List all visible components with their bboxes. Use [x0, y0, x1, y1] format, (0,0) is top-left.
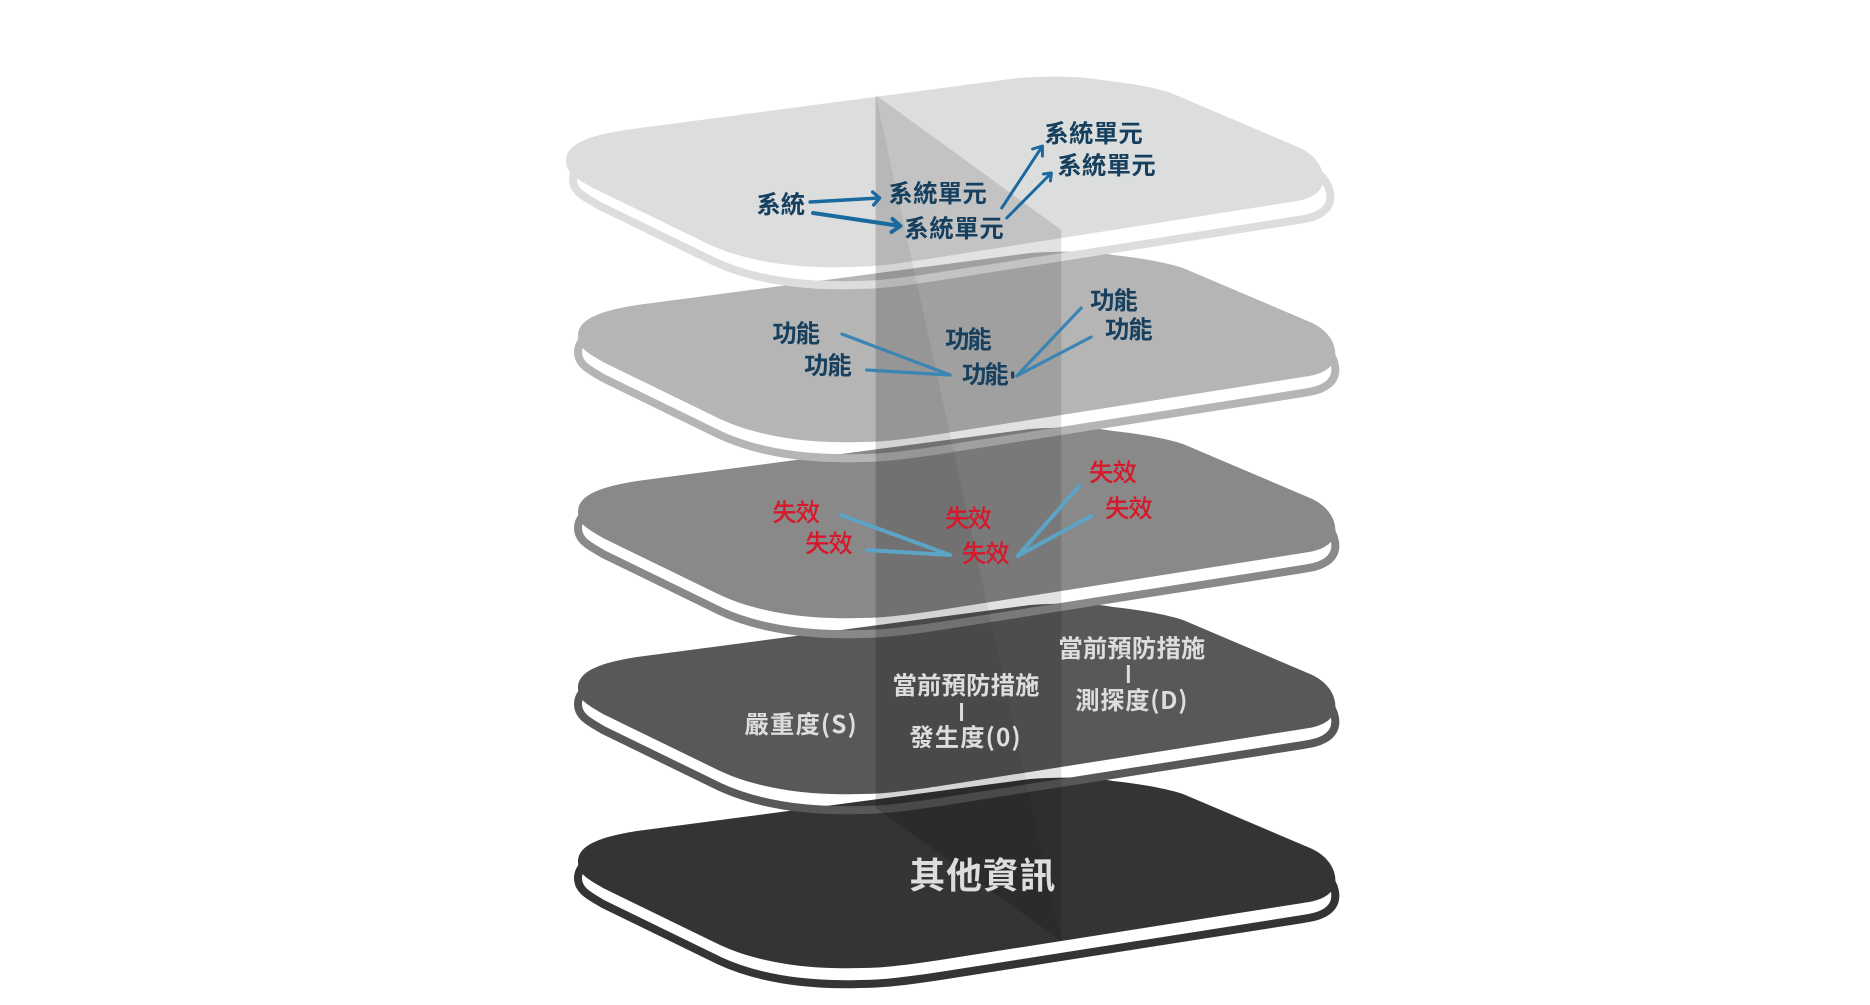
layer 2 text and lines: functions: [772, 282, 1153, 391]
label: function 1: 功能: [772, 315, 820, 350]
label: failure 1: 失效: [772, 494, 820, 529]
label: current prevention, detection: 當前預防措施: [1058, 630, 1205, 665]
label: system element c: 系統單元: [1044, 115, 1143, 150]
label: failure 5: 失效: [1089, 454, 1137, 489]
plate 5: other information: [578, 778, 1335, 984]
arrows: system hierarchy: [810, 146, 1051, 232]
label: system element a: 系統單元: [889, 175, 987, 210]
label: severity: 嚴重度(S): [745, 706, 857, 741]
label: system element b: 系統單元: [904, 210, 1004, 245]
label: function 2: 功能: [804, 347, 852, 382]
label: failure 4: 失效: [962, 535, 1010, 570]
layer 4 text: controls and ratings: [745, 630, 1205, 754]
label: function 5: 功能: [1090, 282, 1138, 317]
connector: prevention to detection: [1127, 665, 1130, 683]
label: current prevention, occurrence: 當前預防措施: [893, 667, 1039, 702]
plate 1: system: [566, 77, 1330, 285]
label: failure 2: 失效: [805, 525, 853, 560]
label: system: 系統: [756, 186, 805, 221]
plate 2: functions: [578, 252, 1335, 458]
translucent vertical connecting plane: [876, 95, 1061, 941]
layer 5 title: other information: 其他資訊: [909, 847, 1055, 899]
layer 3 text and lines: failures: [772, 454, 1153, 570]
connector: prevention to occurrence: [960, 703, 963, 721]
label: failure 6: 失效: [1105, 490, 1153, 525]
label: detection: 測探度(D): [1075, 682, 1187, 717]
plate 4: controls and ratings: [578, 604, 1335, 810]
lines: function links: [842, 308, 1091, 377]
label: occurrence: 發生度(0): [909, 719, 1021, 754]
plate 3: failures: [578, 428, 1335, 634]
layer 1 text and arrows: system tree: [756, 115, 1156, 245]
label: failure 3: 失效: [945, 500, 992, 535]
label: function 3: 功能: [945, 321, 992, 356]
label: function 4: 功能: [962, 356, 1009, 391]
label: function 6: 功能: [1105, 311, 1153, 346]
label: system element d: 系統單元: [1057, 147, 1156, 182]
lines: failure links: [841, 486, 1091, 556]
